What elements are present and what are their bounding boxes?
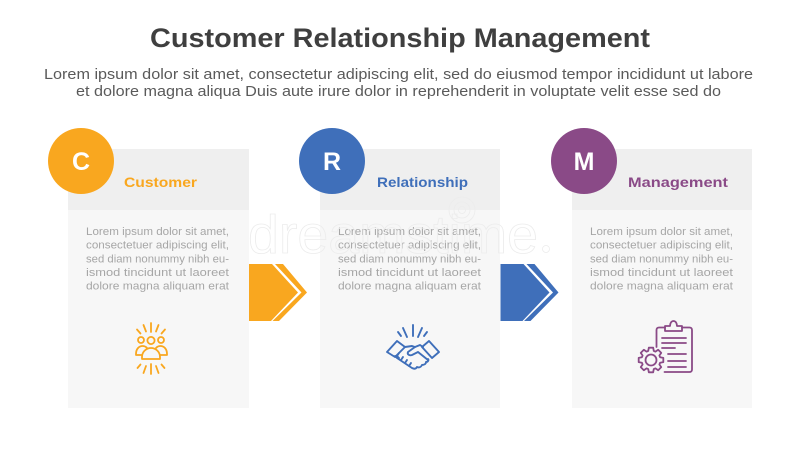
relationship card header [320, 149, 500, 210]
management body text: ismod tincidunt ut laoreet [590, 267, 733, 279]
relationship body text: consectetuer adipiscing elit, [338, 240, 481, 252]
management circle badge: M [574, 148, 594, 176]
icon: people group [136, 323, 167, 374]
management heading: Management [628, 174, 728, 190]
management card body [572, 149, 752, 408]
customer body text: ismod tincidunt ut laoreet [86, 267, 229, 279]
relationship circle badge: R [323, 148, 341, 176]
panel: relationship [299, 128, 500, 408]
arrow: relationship to management [500, 264, 558, 321]
watermark: dreamstime [248, 205, 538, 265]
panel: management [551, 128, 752, 408]
relationship body text [338, 226, 481, 293]
title: Customer Relationship Management [150, 23, 650, 53]
customer circle badge: C [72, 148, 90, 176]
management body text: Lorem ipsum dolor sit amet, [590, 226, 733, 238]
customer body text: consectetuer adipiscing elit, [86, 240, 229, 252]
customer heading: Customer [124, 174, 198, 190]
customer body text: sed diam nonummy nibh eu- [86, 253, 229, 265]
relationship body text: sed diam nonummy nibh eu- [338, 253, 481, 265]
subtitle text [44, 66, 753, 100]
relationship card body [320, 149, 500, 408]
subtitle text: Lorem ipsum dolor sit amet, consectetur adipiscing elit, sed do eiusmod tempor incididunt ut labore [44, 66, 753, 83]
management circle badge [551, 128, 617, 194]
management body text: dolore magna aliquam erat [590, 281, 733, 293]
customer body text [86, 226, 229, 293]
icon: clipboard with gear [639, 321, 692, 372]
customer circle badge [48, 128, 114, 194]
arrow: customer to relationship [249, 264, 307, 321]
customer body text: Lorem ipsum dolor sit amet, [86, 226, 229, 238]
icon: handshake [387, 325, 439, 369]
relationship body text: Lorem ipsum dolor sit amet, [338, 226, 481, 238]
relationship heading: Relationship [377, 174, 468, 190]
management card header [572, 149, 752, 210]
management body text [590, 226, 733, 293]
relationship circle badge [299, 128, 365, 194]
management body text: consectetuer adipiscing elit, [590, 240, 733, 252]
relationship body text: dolore magna aliquam erat [338, 281, 481, 293]
customer card body [68, 149, 249, 408]
customer card header [68, 149, 249, 210]
subtitle text: et dolore magna aliqua Duis aute irure dolor in reprehenderit in voluptate velit esse sed do [76, 83, 721, 100]
relationship body text: ismod tincidunt ut laoreet [338, 267, 481, 279]
panel: customer [48, 128, 249, 408]
customer body text: dolore magna aliquam erat [86, 281, 229, 293]
management body text: sed diam nonummy nibh eu- [590, 253, 733, 265]
